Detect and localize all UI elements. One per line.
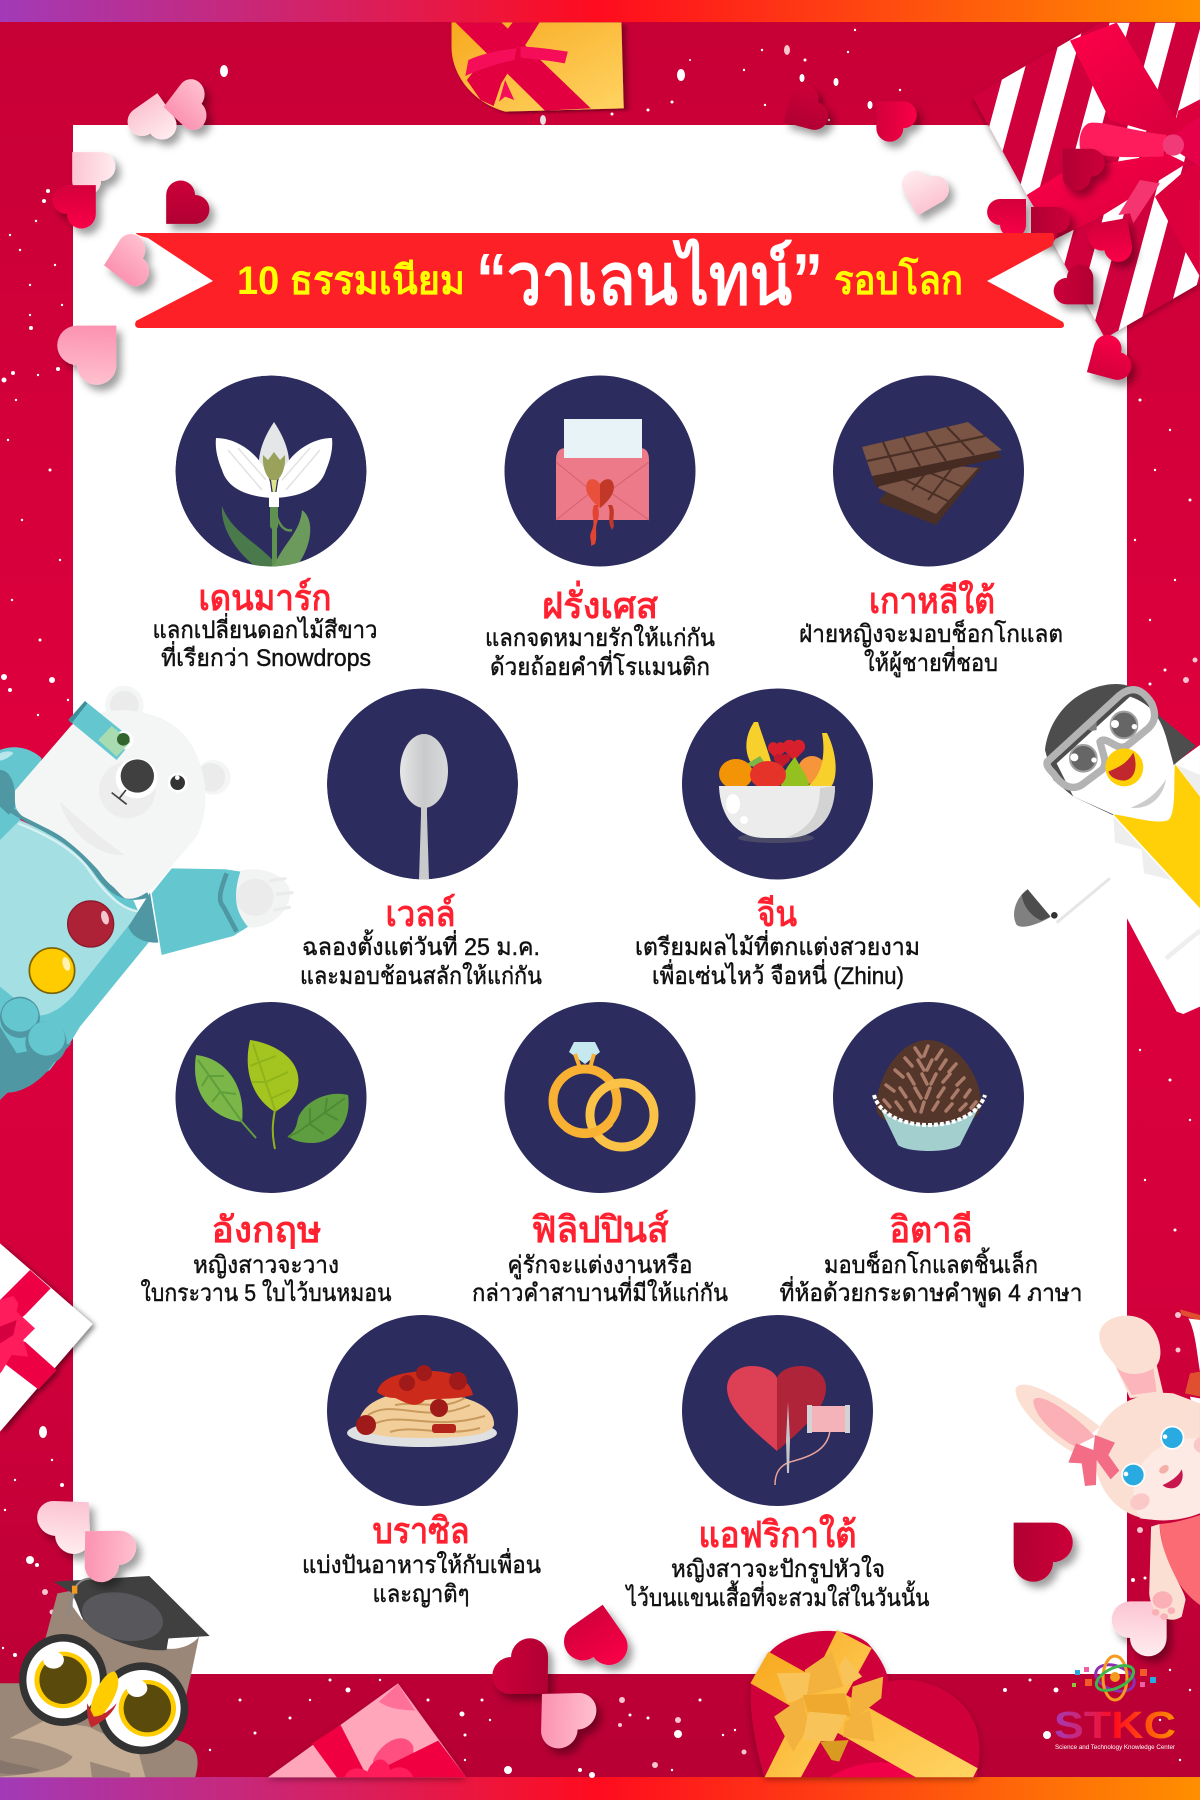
label: Italy: ที่ห้อด้วยกระดาษคำพูด 4 ภาษา	[780, 1276, 1082, 1308]
label: Wales: เวลล์	[386, 893, 456, 934]
item: France	[485, 376, 715, 681]
logo mark	[1072, 1656, 1156, 1700]
heading: 10 ธรรมเนียม “วาเลนไทน์” รอบโลก: รอบโลก	[834, 257, 963, 303]
label: Denmark	[152, 577, 378, 672]
label: Brazil: และญาติๆ	[372, 1581, 470, 1608]
character: penguin mascot	[1014, 684, 1200, 1014]
rabbit lower body	[1149, 1515, 1200, 1620]
label: Philippines: คู่รักจะแต่งงานหรือ	[508, 1252, 692, 1280]
character: rabbit mascot	[1016, 1309, 1200, 1620]
label: South Africa: หญิงสาวจะปักรูปหัวใจ	[671, 1555, 885, 1584]
icon: love letter	[504, 376, 696, 566]
label: Wales	[300, 893, 542, 990]
label: Philippines	[472, 1209, 728, 1307]
item: England	[140, 1002, 392, 1307]
icon: bay leaves	[176, 1002, 366, 1193]
label: England	[140, 1209, 392, 1307]
label: Italy: มอบช็อกโกแลตชิ้นเล็ก	[824, 1247, 1038, 1279]
item: Wales	[300, 688, 542, 990]
white content panel	[73, 125, 1127, 1674]
item: South Korea	[799, 376, 1063, 678]
label: China	[635, 893, 920, 990]
title ribbon banner	[135, 233, 1064, 328]
label: South Korea	[799, 579, 1063, 678]
label: Italy	[780, 1209, 1082, 1308]
bottom gradient bar	[0, 1777, 1200, 1800]
label: Brazil: บราซิล	[372, 1510, 470, 1551]
label: Brazil	[302, 1510, 541, 1608]
label: China: จีน	[757, 893, 797, 934]
icon: heart with needle and thread	[682, 1315, 873, 1506]
label: Brazil: แบ่งปันอาหารให้กับเพื่อน	[302, 1548, 541, 1579]
item: South Africa	[625, 1315, 930, 1612]
item: Denmark	[152, 376, 378, 672]
top gradient bar	[0, 0, 1200, 22]
heading: 10 ธรรมเนียม “วาเลนไทน์” รอบโลก	[237, 237, 963, 320]
label: France: ด้วยถ้อยคำที่โรแมนติก	[490, 650, 710, 681]
label: South Korea: ให้ผู้ชายที่ชอบ	[864, 646, 998, 678]
logo wordmark: STKC	[1054, 1705, 1176, 1747]
item: Philippines	[472, 1002, 728, 1307]
gift box: top centre heart box	[452, 22, 624, 112]
character: owl mascot	[0, 1576, 210, 1777]
label: South Korea: เกาหลีใต้	[869, 579, 995, 621]
label: South Africa: ไว้บนแขนเสื้อที่จะสวมใส่ในวันนั้น	[625, 1580, 930, 1612]
gift box: left edge white box	[0, 1243, 93, 1432]
icon: chocolate bars	[833, 376, 1024, 566]
icon: wedding rings	[504, 1002, 696, 1193]
item: Brazil	[302, 1315, 541, 1608]
item: Italy	[780, 1002, 1082, 1308]
label: China: เพื่อเซ่นไหว้ จือหนี่ (Zhinu)	[652, 959, 904, 990]
label: England: อังกฤษ	[212, 1209, 322, 1250]
label: France: ฝรั่งเศส	[542, 580, 658, 626]
label: Denmark: แลกเปลี่ยนดอกไม้สีขาว	[152, 613, 378, 644]
item: China	[635, 688, 920, 990]
icon: fruit bowl	[682, 688, 873, 880]
label: Philippines: ฟิลิปปินส์	[532, 1209, 669, 1250]
label: France: แลกจดหมายรักให้แก่กัน	[485, 624, 715, 652]
floating hearts: bottom	[30, 1480, 1189, 1756]
icon: spoon	[327, 688, 518, 880]
gift box: top right striped box	[971, 22, 1200, 338]
character: polar bear mascot	[0, 686, 292, 1100]
gift box: pink box bottom left	[268, 1683, 466, 1777]
floating hearts: top left	[47, 78, 215, 393]
label: China: เตรียมผลไม้ที่ตกแต่งสวยงาม	[635, 930, 920, 961]
logo: STKC	[1054, 1656, 1176, 1751]
logo tagline: Science and Technology Knowledge Center	[1055, 1745, 1175, 1751]
gift box: gold ribbon heart box bottom centre	[750, 1630, 980, 1777]
label: England: ใบกระวาน 5 ใบไว้บนหมอน	[140, 1279, 392, 1307]
label: Philippines: กล่าวคำสาบานที่มีให้แก่กัน	[472, 1276, 728, 1307]
label: Wales: ฉลองตั้งแต่วันที่ 25 ม.ค.	[302, 929, 540, 961]
heading: 10 ธรรมเนียม “วาเลนไทน์” รอบโลก: “วาเลนไทน์”	[476, 237, 823, 320]
label: Wales: และมอบช้อนสลักให้แก่กัน	[300, 962, 542, 990]
icon: chocolate truffle	[833, 1002, 1024, 1193]
label: South Korea: ฝ่ายหญิงจะมอบช็อกโกแลต	[799, 619, 1063, 648]
label: Denmark: ที่เรียกว่า Snowdrops	[161, 641, 371, 672]
rabbit head	[1016, 1309, 1200, 1520]
icon: snowdrop flower	[176, 376, 366, 572]
label: England: หญิงสาวจะวาง	[193, 1252, 339, 1279]
heading: 10 ธรรมเนียม “วาเลนไทน์” รอบโลก: 10 ธรรมเนียม	[237, 259, 465, 303]
label: France	[485, 580, 715, 681]
floating hearts: top right	[772, 80, 1146, 393]
label: South Africa	[625, 1513, 930, 1612]
icon: spaghetti plate	[327, 1315, 518, 1506]
label: South Africa: แอฟริกาใต้	[698, 1513, 856, 1555]
label: Denmark: เดนมาร์ก	[198, 577, 332, 618]
label: Italy: อิตาลี	[890, 1209, 972, 1250]
